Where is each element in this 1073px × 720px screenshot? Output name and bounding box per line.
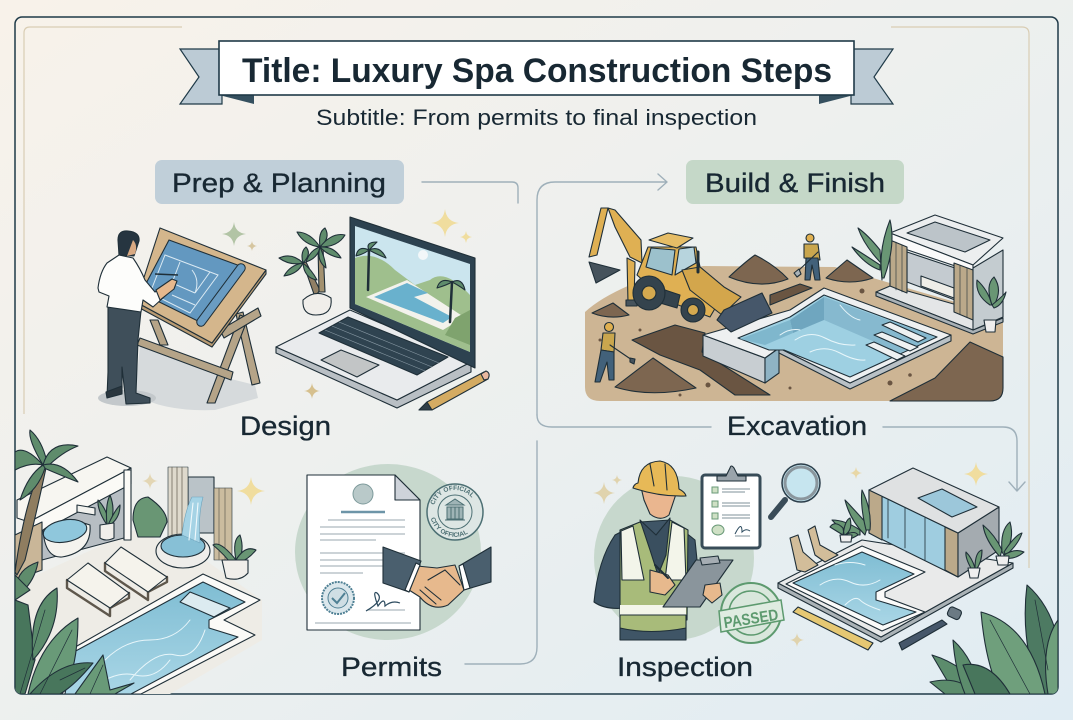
- pencil: [419, 371, 489, 410]
- certified badge: [322, 582, 354, 614]
- city official stamp: [426, 483, 484, 541]
- permit document: [307, 475, 420, 630]
- ground: [585, 266, 1003, 401]
- soil specks: [598, 288, 912, 396]
- inspector: [594, 461, 733, 640]
- waterfall fountain: [156, 467, 232, 568]
- laptop: [276, 217, 475, 408]
- lounge chairs: [67, 547, 167, 616]
- drafting board: [136, 270, 266, 347]
- potted plant by bath: [98, 495, 120, 540]
- pool shell: [703, 288, 951, 389]
- heading: Build & Finish: Build & Finish: [705, 168, 885, 198]
- illustration: design: [98, 209, 489, 410]
- potted plant right: [213, 535, 256, 579]
- terrace plants: [830, 490, 1024, 578]
- palm plant: [279, 228, 345, 315]
- soil mounds: [592, 255, 1003, 401]
- blueprint: [141, 240, 243, 323]
- handshake: [383, 547, 491, 607]
- title: Title: Luxury Spa Construction Steps: [242, 52, 832, 90]
- backhoe arm: [589, 208, 642, 306]
- heading: Build & Finish: [686, 160, 904, 204]
- sparkles: [593, 462, 988, 647]
- illustration: permits: [295, 464, 492, 640]
- trenches: [632, 284, 812, 395]
- drafting table legs: [137, 308, 261, 403]
- arrow: permits to excavation: [465, 441, 537, 664]
- city official stamp: CITY OFFICIAL: [431, 518, 468, 537]
- ruler: [793, 607, 873, 650]
- bathtub: [41, 516, 90, 557]
- small plant by wall: [15, 562, 38, 600]
- magnifying glass: [771, 464, 820, 517]
- heading: Prep & Planning: [155, 160, 404, 204]
- green backdrop: [295, 464, 481, 640]
- label: Design: Design: [240, 411, 331, 441]
- blueprint roll: [201, 268, 241, 322]
- illustration: excavation: [585, 208, 1006, 401]
- tropical foreground leaves: [15, 588, 134, 694]
- lounge chairs: [790, 535, 818, 572]
- backhoe body: [633, 233, 772, 332]
- floor shadow: [135, 345, 258, 410]
- sparkles: [222, 209, 472, 399]
- foreground leaves: bottom right: [930, 585, 1058, 694]
- patio: [15, 548, 262, 694]
- illustration: inspection: [593, 461, 1024, 650]
- title banner: [180, 41, 893, 104]
- label: Inspection: Inspection: [617, 652, 753, 682]
- swimming pool: [60, 574, 260, 694]
- arrow: to build and finish: [537, 174, 667, 415]
- pavilion wall: [15, 457, 131, 580]
- green backdrop: [594, 476, 754, 640]
- unfinished spa building: [876, 215, 1003, 334]
- heading: Prep & Planning: Prep & Planning: [172, 168, 386, 198]
- inner gold corner lines: [24, 27, 1029, 568]
- label: Permits: Permits: [341, 652, 442, 682]
- connector: excavation left: [537, 415, 711, 427]
- palm tree: [15, 430, 78, 575]
- plants: [852, 220, 1006, 332]
- illustration: luxury spa: [15, 430, 265, 694]
- person: [98, 231, 178, 406]
- workers: [595, 234, 820, 382]
- label: Excavation: Excavation: [727, 411, 867, 441]
- finished spa: [778, 468, 1013, 650]
- arrow: planning connector: [422, 182, 518, 203]
- tool: [899, 620, 947, 650]
- shrub: [133, 497, 167, 537]
- passed stamp: [719, 583, 784, 643]
- arrow: excavation to inspection: [883, 427, 1025, 491]
- subtitle: Subtitle: From permits to final inspection: [316, 105, 757, 130]
- city official stamp: CITY OFFICIAL: [430, 486, 474, 504]
- sparkles: [142, 473, 265, 505]
- passed stamp: PASSED: [723, 607, 780, 632]
- checklist clipboard: [702, 466, 760, 548]
- signature: [366, 593, 400, 611]
